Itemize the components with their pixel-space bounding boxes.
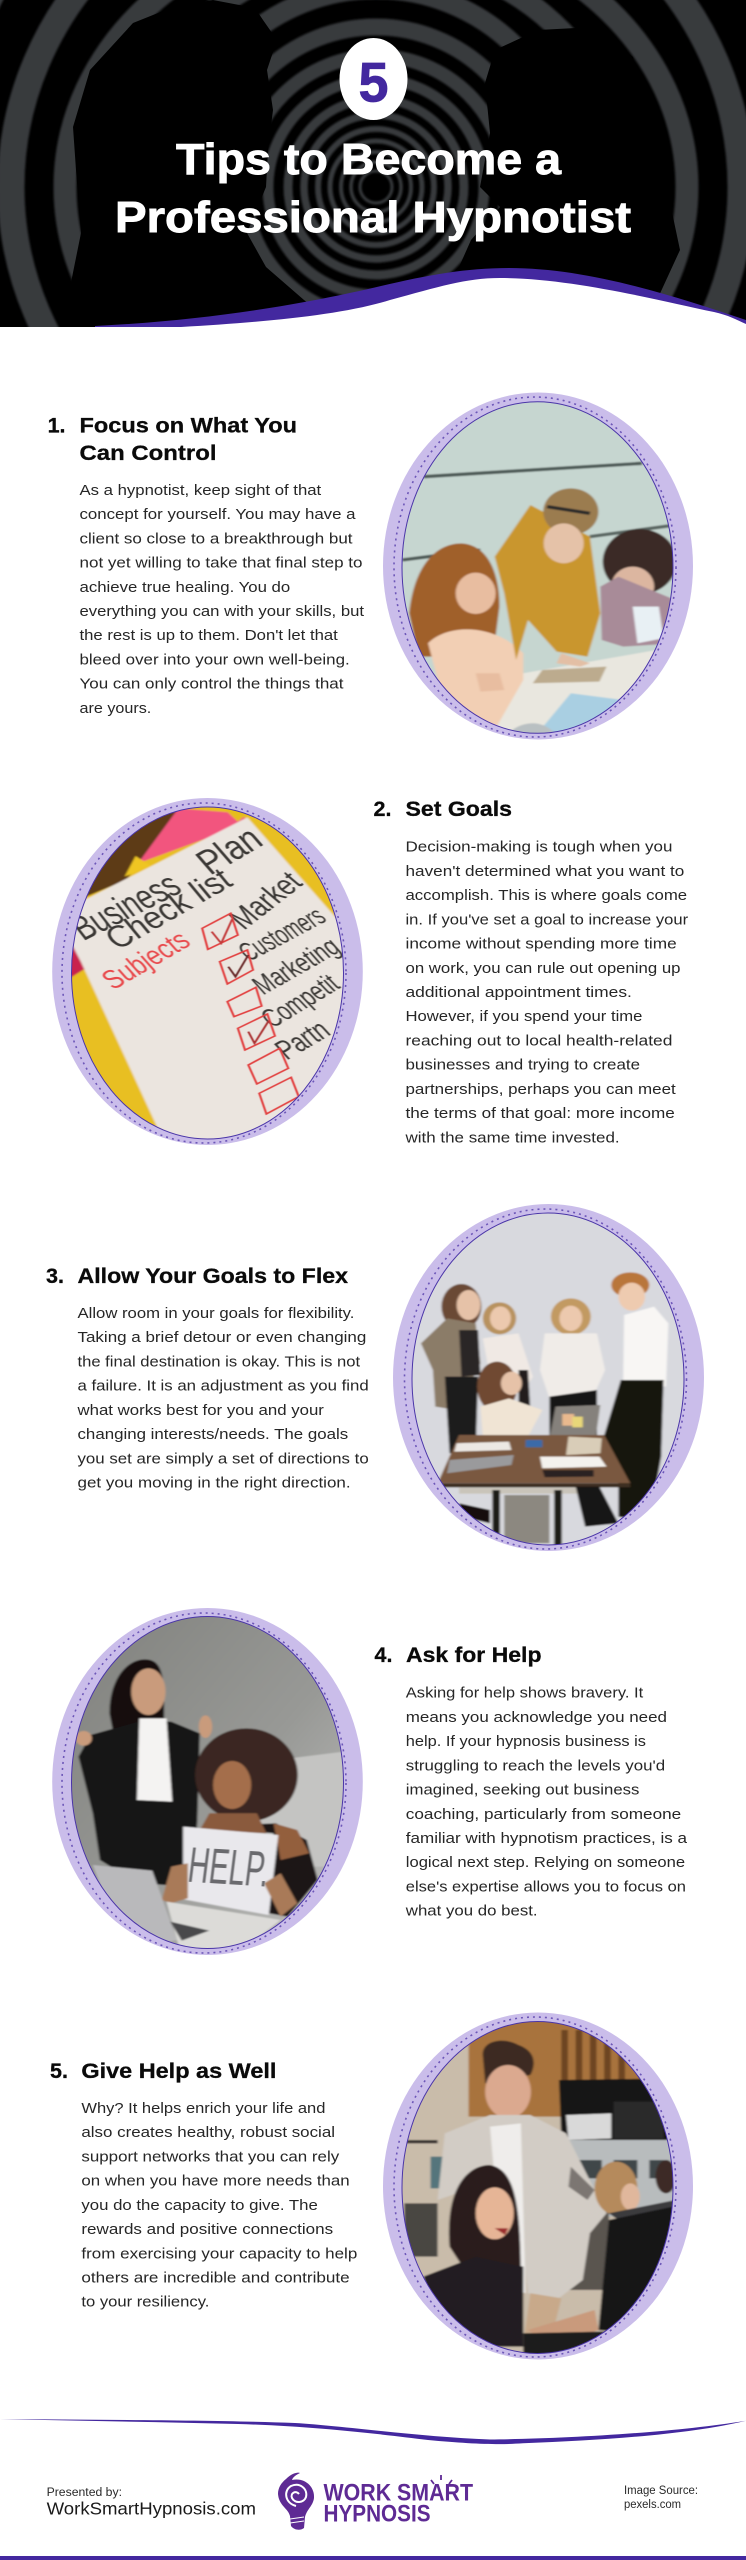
logo wordmark: WORK SMART: [324, 2480, 473, 2507]
tip 2 body text: additional appointment times.: [406, 984, 632, 1001]
icon: spiral light bulb: [278, 2473, 314, 2530]
tip 3 body text: changing interests/needs. The goals: [78, 1426, 349, 1443]
tip 3 body text: Allow room in your goals for flexibility.: [78, 1305, 354, 1322]
tip 5 body text: you do the capacity to give. The: [81, 2197, 318, 2214]
tip 3 body text: a failure. It is an adjustment as you find: [78, 1378, 369, 1395]
tip 2 oval photo: business plan checklist: Plan: [184, 820, 273, 881]
tip 5 body text: to your resiliency.: [81, 2294, 209, 2311]
tip 3 body text: Taking a brief detour or even changing: [78, 1329, 366, 1346]
title: Tips to Become a: [176, 135, 562, 184]
tip 2 body text: on work, you can rule out opening up: [406, 960, 680, 977]
tip 5 oval photo: man helping woman at a computer: [383, 2012, 693, 2360]
panel: tip 4: [52, 1608, 688, 1957]
tip 3 oval photo: team standing around a table: [393, 1204, 704, 1553]
tip 1 body text: [80, 482, 365, 717]
image source credit: pexels.com: [624, 2499, 681, 2511]
title: [115, 135, 631, 242]
tip 3 body text: get you moving in the right direction.: [78, 1474, 351, 1492]
tip 2 body text: with the same time invested.: [404, 1129, 620, 1146]
tip 2 body text: businesses and trying to create: [406, 1057, 640, 1074]
tip 2 oval photo: business plan checklist: Business: [60, 866, 191, 947]
tip 2 oval photo: business plan checklist: [52, 798, 363, 1147]
tip 5 body text: support networks that you can rely: [81, 2148, 340, 2165]
tip 1 body text: As a hypnotist, keep sight of that: [80, 482, 322, 499]
panel: tip 3: [46, 1204, 704, 1553]
tip 4 body text: [405, 1685, 688, 1920]
tip 2 body text: Decision-making is tough when you: [406, 839, 672, 856]
presented by: Presented by:: [47, 2487, 122, 2499]
tip 3 body text: what works best for you and your: [76, 1402, 324, 1419]
tip 2 body text: income without spending more time: [406, 936, 677, 953]
tip 2 body text: [404, 839, 688, 1146]
tip 4 oval photo: woman holding a help sign: HELP.: [185, 1837, 273, 1898]
tip 2 oval photo: business plan checklist: Marketing: [244, 932, 348, 999]
tip 2 oval photo: business plan checklist: Subjects: [93, 926, 198, 994]
logo wordmark: [324, 2480, 473, 2528]
footer wave: [0, 2419, 746, 2444]
tip 3 body text: the final destination is okay. This is not: [78, 1353, 361, 1370]
tip 1 body text: You can only control the things that: [80, 676, 344, 693]
tip 4 oval photo: woman holding a help sign: [52, 1608, 363, 1957]
tip 2 body text: reaching out to local health-related: [406, 1032, 672, 1050]
tip 4 heading: Ask for Help: [406, 1643, 542, 1667]
tip 1 body text: everything you can with your skills, but: [80, 603, 365, 620]
panel: tip 5: [50, 2012, 693, 2360]
tip 3 body text: you set are simply a set of directions to: [78, 1450, 369, 1467]
tip 2 heading: 2.: [374, 797, 391, 821]
tip 1 body text: not yet willing to take that final step to: [80, 555, 362, 572]
header wave: purple band: [95, 268, 746, 327]
number badge: [340, 38, 408, 120]
tip 5 body text: on when you have more needs than: [81, 2173, 350, 2190]
tip 1 heading: Can Control: [80, 441, 216, 465]
tip 1 body text: are yours.: [80, 700, 151, 717]
tip 5 body text: Why? It helps enrich your life and: [81, 2100, 325, 2117]
bottom bar: [0, 2556, 746, 2560]
tip 2 body text: accomplish. This is where goals come: [406, 887, 687, 904]
tip 4 body text: help. If your hypnosis business is: [406, 1733, 646, 1750]
tip 2 oval photo: business plan checklist: Check list: [95, 862, 243, 955]
tip 1 body text: bleed over into your own well-being.: [80, 651, 350, 668]
presented by: [47, 2487, 256, 2519]
tip 3 body text: [76, 1305, 369, 1492]
tip 2 oval photo: business plan checklist: Market: [220, 867, 313, 934]
image source credit: Image Source:: [624, 2485, 698, 2497]
tip 1 body text: the rest is up to them. Don't let that: [80, 627, 339, 644]
tip 5 heading: Give Help as Well: [81, 2059, 276, 2083]
tip 5 body text: others are incredible and contribute: [81, 2270, 350, 2286]
tip 4 body text: means you acknowledge you need: [406, 1709, 667, 1726]
tip 4 body text: coaching, particularly from someone: [406, 1806, 681, 1823]
tip 4 body text: what you do best.: [405, 1903, 538, 1920]
panel: tip 1: [48, 392, 695, 743]
tip 3 heading: 3.: [46, 1264, 64, 1288]
tip 5 body text: from exercising your capacity to help: [81, 2245, 357, 2262]
tip 2 oval photo: business plan checklist: Customers: [230, 902, 333, 966]
tip 1 heading: [48, 414, 297, 465]
tip 2 body text: However, if you spend your time: [406, 1008, 642, 1025]
tip 2 oval photo: business plan checklist: Competit: [252, 969, 348, 1033]
presented by: WorkSmartHypnosis.com: [47, 2499, 256, 2519]
tip 5 body text: also creates healthy, robust social: [81, 2124, 335, 2141]
logo: Work Smart Hypnosis: [278, 2473, 473, 2530]
tip 4 body text: familiar with hypnotism practices, is a: [406, 1830, 688, 1847]
tip 2 body text: haven't determined what you want to: [406, 863, 684, 880]
tip 2 heading: Set Goals: [406, 797, 512, 821]
tip 1 body text: achieve true healing. You do: [80, 579, 290, 596]
header wave: white hump: [181, 278, 746, 332]
tip 4 body text: logical next step. Relying on someone: [406, 1854, 685, 1871]
panel: tip 2: [52, 797, 688, 1147]
logo wordmark: HYPNOSIS: [324, 2501, 430, 2528]
tip 5 body text: rewards and positive connections: [81, 2221, 334, 2238]
title: Professional Hypnotist: [115, 193, 631, 242]
tip 4 body text: else's expertise allows you to focus on: [406, 1878, 686, 1896]
tip 2 body text: the terms of that goal: more income: [406, 1105, 675, 1122]
tip 4 body text: struggling to reach the levels you'd: [406, 1757, 665, 1774]
tip 1 heading: 1.: [48, 414, 66, 438]
tip 5 heading: 5.: [50, 2059, 68, 2083]
tip 4 heading: 4.: [374, 1643, 392, 1667]
number badge: 5: [358, 50, 388, 114]
tip 2 body text: partnerships, perhaps you can meet: [406, 1081, 677, 1098]
tip 4 body text: imagined, seeking out business: [406, 1782, 640, 1799]
tip 1 oval photo: three colleagues around a tablet: [383, 392, 695, 743]
tip 2 oval photo: business plan checklist: Partn: [265, 1015, 338, 1064]
tip 2 body text: in. If you've set a goal to increase your: [406, 911, 688, 928]
image source credit: [624, 2485, 698, 2511]
tip 3 heading: Allow Your Goals to Flex: [78, 1264, 348, 1288]
tip 1 body text: concept for yourself. You may have a: [80, 506, 356, 523]
header: hypnotic spiral background with silhouettes: [0, 0, 746, 327]
tip 4 body text: Asking for help shows bravery. It: [406, 1685, 644, 1702]
tip 1 body text: client so close to a breakthrough but: [80, 530, 353, 547]
tip 1 heading: Focus on What You: [80, 414, 297, 438]
tip 5 body text: [81, 2100, 357, 2311]
